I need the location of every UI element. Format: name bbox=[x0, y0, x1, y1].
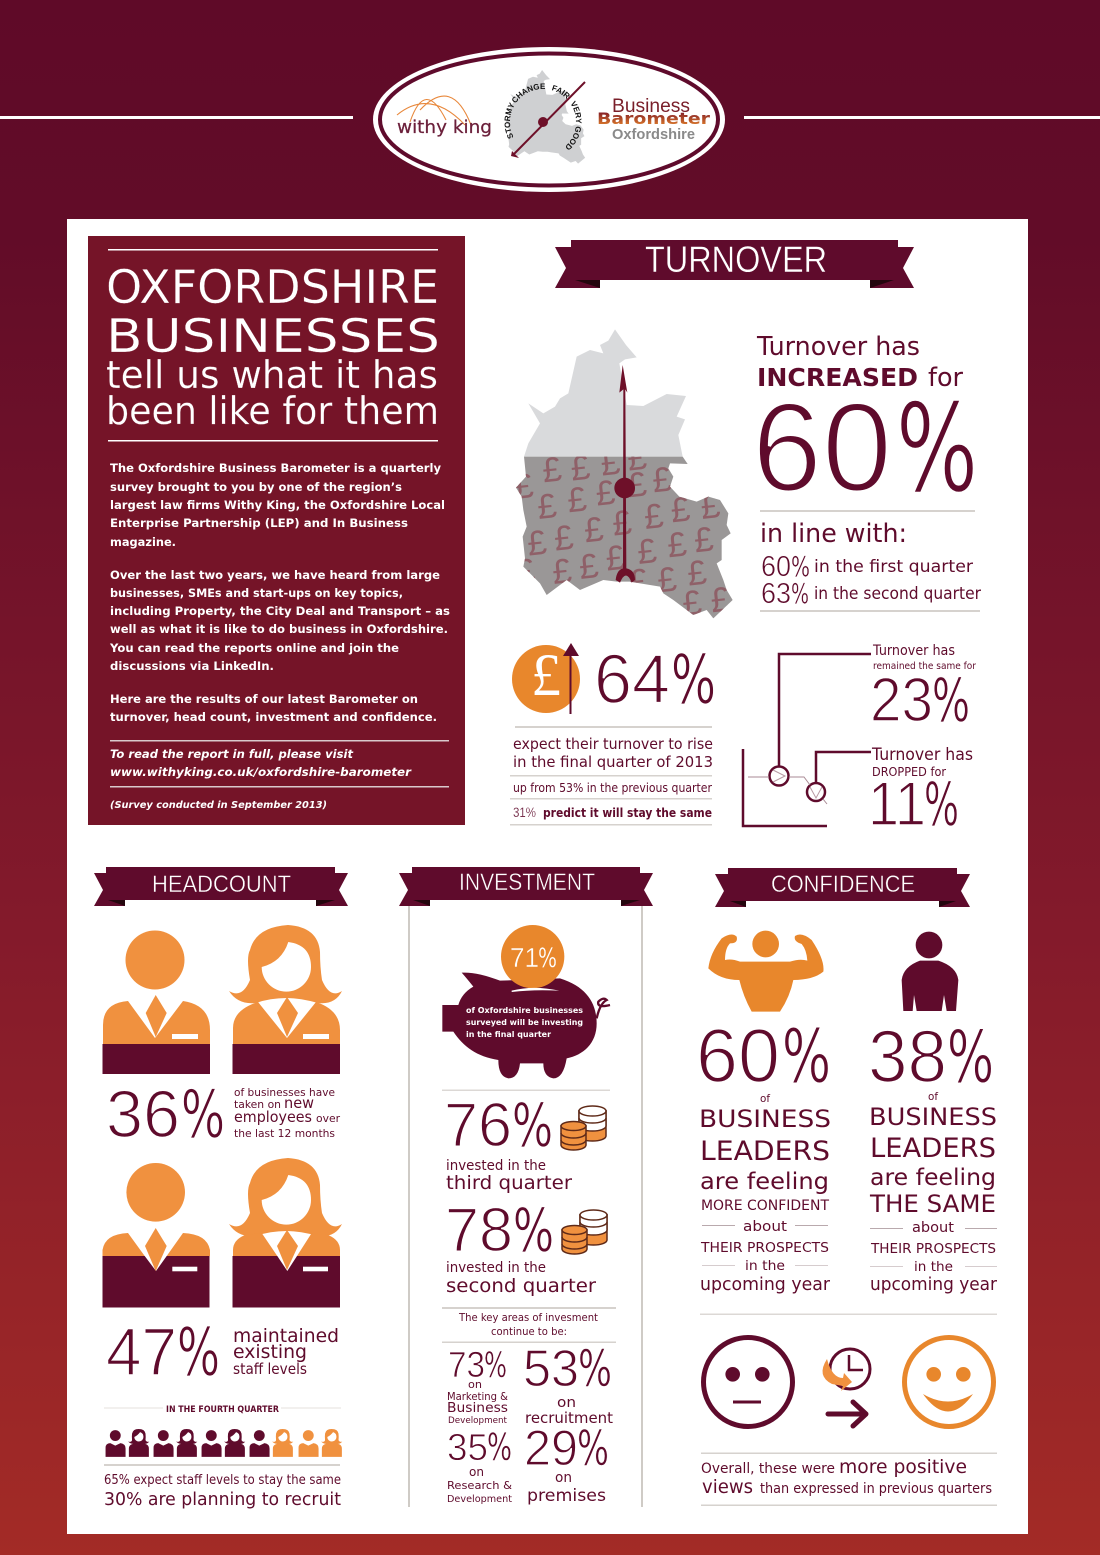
stat: 36% new employees: new bbox=[284, 1094, 314, 1112]
stat: 60% more confident: THEIR PROSPECTS bbox=[700, 1241, 829, 1256]
logo: Business Barometer Oxfordshire: Barometer bbox=[597, 109, 710, 128]
logo: barometer map dial: FAIR bbox=[552, 85, 570, 99]
stat: 73% marketing: Business bbox=[447, 1401, 508, 1416]
stat: 29% premises: on bbox=[555, 1470, 572, 1486]
logo: barometer map dial: CHANGE bbox=[512, 84, 546, 102]
stat: turnover increased 60%: for bbox=[928, 363, 963, 393]
icon: muscular figure bbox=[708, 931, 824, 1012]
stat: 36% new employees: % bbox=[181, 1078, 225, 1153]
stat: fourth quarter staffing bbox=[104, 1464, 341, 1510]
stat: 47% maintained staff levels: maintained bbox=[233, 1325, 339, 1347]
icon: Oxfordshire map with pound pattern bbox=[516, 330, 732, 618]
text: overall conclusion: Overall, these were bbox=[701, 1461, 835, 1477]
stat: turnover increased 60%: in the second quarter bbox=[814, 584, 981, 604]
text: overall conclusion: views bbox=[702, 1476, 753, 1498]
icon: coins bbox=[562, 1210, 607, 1254]
text: overall conclusion: than expressed in previous quarters bbox=[760, 1481, 992, 1497]
stat: 78% second quarter: % bbox=[513, 1196, 554, 1266]
stat: 64% expect turnover to rise: in the final quarter of 2013 bbox=[513, 753, 713, 771]
stat: turnover same 23%: Turnover has bbox=[872, 643, 955, 659]
intro paragraph 2: well as what it is like to do business in Oxfordshire. bbox=[110, 622, 448, 636]
heading: investment banner bbox=[399, 867, 653, 906]
stat: 60% more confident: upcoming year bbox=[700, 1274, 831, 1295]
pictogram: ten staff icons bbox=[106, 1429, 342, 1457]
intro paragraph 2: You can read the reports online and join the bbox=[109, 641, 399, 655]
stat: turnover dropped 11%: Turnover has bbox=[871, 745, 973, 764]
icon: Oxfordshire map with pound pattern: £ bbox=[512, 467, 535, 507]
stat: 60% more confident: about bbox=[743, 1219, 788, 1235]
icon: neutral face bbox=[704, 1338, 792, 1426]
stat: 53% recruitment: on bbox=[557, 1395, 576, 1411]
stat: 78% second quarter bbox=[445, 1196, 596, 1297]
stat: turnover same 23%: 23 bbox=[870, 666, 933, 735]
stat: fourth quarter staffing: 65% expect staff levels to stay the same bbox=[104, 1473, 341, 1488]
title: tell us what it has bbox=[106, 353, 438, 397]
stat: 78% second quarter: 78 bbox=[445, 1196, 513, 1265]
heading: confidence banner bbox=[715, 868, 970, 907]
intro paragraph 2: including Property, the City Deal and Transport – as bbox=[110, 604, 450, 618]
icon: Oxfordshire map with pound pattern: £ bbox=[599, 444, 622, 484]
stat: turnover increased 60%: in the first quarter bbox=[814, 557, 973, 577]
icon: Oxfordshire map with pound pattern: £ bbox=[526, 524, 549, 564]
stat: 73% marketing bbox=[447, 1344, 508, 1426]
stat: 60% more confident: of bbox=[760, 1092, 771, 1105]
intro paragraph 1 bbox=[110, 461, 445, 549]
intro paragraph 2: businesses, SMEs and start-ups on key topics, bbox=[110, 586, 403, 600]
intro paragraph 2 bbox=[109, 568, 450, 673]
stat: 60% more confident: BUSINESS bbox=[699, 1105, 831, 1133]
stat: 29% premises bbox=[524, 1420, 609, 1506]
icon: Oxfordshire map with pound pattern: £ bbox=[626, 439, 649, 479]
icon: Oxfordshire map with pound pattern: £ bbox=[582, 510, 605, 550]
stat: turnover increased 60%: 63 bbox=[761, 578, 791, 610]
icon: Oxfordshire map with pound pattern: £ bbox=[636, 532, 659, 572]
title bbox=[106, 260, 440, 433]
survey note: (Survey conducted in September 2013) bbox=[110, 800, 327, 811]
stat: 76% third quarter: invested in the bbox=[446, 1158, 546, 1174]
stat: 64% expect turnover to rise: expect their turnover to rise bbox=[513, 735, 713, 753]
intro paragraph 1: survey brought to you by one of the region’s bbox=[110, 480, 402, 494]
stat: turnover increased 60%: 60 bbox=[761, 551, 791, 583]
intro paragraph 1: The Oxfordshire Business Barometer is a quarterly bbox=[110, 461, 441, 475]
panel: introduction bbox=[88, 236, 465, 825]
text: key areas heading bbox=[442, 1307, 616, 1343]
text: overall conclusion: more positive bbox=[839, 1456, 967, 1478]
intro paragraph 3: Here are the results of our latest Barometer on bbox=[110, 692, 418, 706]
logo badge bbox=[373, 47, 725, 192]
stat: 53% recruitment: 53 bbox=[523, 1340, 579, 1398]
intro paragraph 1: magazine. bbox=[110, 535, 176, 549]
icon: piggy bank with coin: 71 bbox=[510, 942, 539, 973]
chart: gauge pipes bbox=[743, 654, 871, 826]
stat: turnover increased 60%: % bbox=[791, 577, 809, 610]
stat: 36% new employees bbox=[106, 1077, 340, 1153]
stat: 60% more confident bbox=[696, 1014, 831, 1295]
logo: Business Barometer Oxfordshire: Oxfordshire bbox=[612, 126, 695, 143]
text: key areas heading: continue to be: bbox=[491, 1325, 567, 1338]
stat: 73% marketing: Development bbox=[448, 1416, 507, 1426]
icon: smiling face bbox=[904, 1338, 994, 1426]
stat: 36% new employees: over bbox=[316, 1112, 340, 1125]
icon: coins bbox=[561, 1106, 606, 1150]
stat: 29% premises: 29 bbox=[524, 1420, 578, 1476]
icon: Oxfordshire map with pound pattern: £ bbox=[699, 487, 722, 527]
stat: 38% the same: are feeling bbox=[870, 1165, 996, 1191]
stat: turnover dropped 11%: % bbox=[924, 770, 959, 840]
stat: 38% the same bbox=[868, 1015, 998, 1295]
stat: 47% maintained staff levels: % bbox=[177, 1314, 220, 1391]
stat: 35% research: Development bbox=[447, 1494, 512, 1505]
logo: withy king: withy king bbox=[397, 117, 492, 138]
icon: Oxfordshire map with pound pattern: £ bbox=[552, 519, 575, 559]
stat: 35% research: 35 bbox=[447, 1427, 488, 1469]
subheading: in the fourth quarter: IN THE FOURTH QUARTER bbox=[166, 1405, 279, 1415]
icon: Oxfordshire map with pound pattern: £ bbox=[656, 560, 679, 600]
icon: Oxfordshire map with pound pattern: £ bbox=[551, 552, 574, 592]
stat: 60% more confident: % bbox=[782, 1014, 831, 1100]
icon: Oxfordshire map with pound pattern: £ bbox=[709, 580, 732, 620]
icon: Oxfordshire map with pound pattern: £ bbox=[541, 450, 564, 490]
stat: 38% the same: in the bbox=[914, 1260, 953, 1275]
stat: 60% more confident: are feeling bbox=[700, 1169, 829, 1195]
stat: 47% maintained staff levels: existing bbox=[233, 1341, 307, 1363]
text: overall conclusion bbox=[701, 1452, 997, 1506]
stat: 47% maintained staff levels: staff levels bbox=[233, 1360, 307, 1378]
logo: barometer map dial: VERY GOOD bbox=[566, 100, 582, 150]
icon: woman orange bbox=[229, 925, 342, 1074]
icon: Oxfordshire map with pound pattern: £ bbox=[536, 487, 559, 527]
stat: 64% expect turnover to rise: 64 bbox=[594, 640, 670, 718]
heading: turnover banner bbox=[555, 239, 914, 288]
stat: 64% expect turnover to rise: predict it will stay the same bbox=[543, 806, 712, 820]
stat: 38% the same: upcoming year bbox=[870, 1274, 998, 1295]
stat: 36% new employees: employees bbox=[234, 1108, 312, 1126]
title: been like for them bbox=[106, 389, 439, 433]
heading: investment banner: INVESTMENT bbox=[459, 869, 595, 896]
stat: turnover same 23% bbox=[870, 643, 977, 736]
stat: turnover increased 60%: 60 bbox=[752, 377, 892, 518]
stat: 36% new employees: taken on bbox=[234, 1098, 281, 1111]
logo: Business Barometer Oxfordshire bbox=[597, 96, 710, 143]
stat: 73% marketing: 73 bbox=[448, 1344, 485, 1385]
icon: Oxfordshire map with pound pattern: £ bbox=[651, 460, 674, 500]
stat: 47% maintained staff levels: 47 bbox=[106, 1314, 177, 1390]
stat: 73% marketing: Marketing & bbox=[447, 1391, 508, 1403]
icon: Oxfordshire map with pound pattern: £ bbox=[627, 562, 650, 602]
icon: man orange bbox=[102, 930, 210, 1074]
icon: Oxfordshire map with pound pattern: £ bbox=[604, 539, 627, 579]
icon: Oxfordshire map with pound pattern: £ bbox=[669, 490, 692, 530]
stat: 36% new employees: the last 12 months bbox=[234, 1127, 335, 1140]
icon: Oxfordshire map with pound pattern: £ bbox=[594, 474, 617, 514]
icon: Oxfordshire map with pound pattern: £ bbox=[681, 584, 704, 624]
intro paragraph 2: discussions via LinkedIn. bbox=[110, 659, 274, 673]
stat: 60% more confident: LEADERS bbox=[700, 1136, 830, 1167]
stat: turnover dropped 11%: 11 bbox=[868, 770, 926, 839]
stat: 38% the same: 38 bbox=[868, 1015, 947, 1098]
heading: headcount banner bbox=[94, 867, 348, 906]
stat: 73% marketing: on bbox=[468, 1378, 482, 1391]
stat: 78% second quarter: second quarter bbox=[446, 1275, 596, 1297]
stat: turnover same 23%: % bbox=[932, 666, 970, 736]
icon: woman maroon band bbox=[229, 1158, 342, 1308]
logo: Business Barometer Oxfordshire: Business bbox=[612, 96, 690, 117]
heading: confidence banner: CONFIDENCE bbox=[771, 871, 915, 898]
stat: 35% research: % bbox=[487, 1426, 512, 1469]
icon: Oxfordshire map with pound pattern: £ bbox=[569, 449, 592, 489]
stat: turnover increased 60%: in line with: bbox=[760, 519, 907, 549]
stat: 76% third quarter: % bbox=[512, 1091, 553, 1161]
intro paragraph 3: turnover, head count, investment and confidence. bbox=[110, 710, 437, 724]
stat: 29% premises: premises bbox=[527, 1486, 606, 1506]
stat: 53% recruitment: % bbox=[578, 1340, 612, 1398]
stat: 53% recruitment: recruitment bbox=[525, 1409, 613, 1427]
heading: turnover banner: TURNOVER bbox=[645, 239, 827, 280]
stat: 35% research: on bbox=[469, 1465, 484, 1479]
stat: 36% new employees: 36 bbox=[106, 1077, 180, 1152]
stat: turnover increased 60%: % bbox=[896, 378, 978, 520]
icon: piggy bank with coin bbox=[442, 925, 610, 1078]
title: OXFORDSHIRE bbox=[106, 260, 439, 314]
stat: 38% the same: THEIR PROSPECTS bbox=[870, 1242, 996, 1257]
stat: 78% second quarter: invested in the bbox=[446, 1260, 546, 1276]
icon: man maroon band bbox=[102, 1163, 210, 1308]
icon: Oxfordshire map with pound pattern: £ bbox=[577, 547, 600, 587]
stat: 53% recruitment bbox=[523, 1340, 613, 1427]
stat: turnover dropped 11% bbox=[868, 745, 973, 840]
stat: 64% expect turnover to rise: % bbox=[671, 641, 716, 720]
icon: plain figure bbox=[902, 932, 958, 1011]
stat: turnover same 23%: remained the same for bbox=[873, 661, 977, 672]
report link: www.withyking.co.uk/oxfordshire-barometer bbox=[110, 765, 412, 779]
stat: 60% more confident: in the bbox=[745, 1259, 785, 1274]
icon: piggy bank with coin: of Oxfordshire businesses bbox=[466, 1006, 583, 1015]
stat: turnover increased 60%: INCREASED bbox=[757, 363, 918, 392]
logo: withy king bbox=[397, 96, 492, 138]
stat: 38% the same: LEADERS bbox=[870, 1133, 996, 1164]
report link: To read the report in full, please visit bbox=[110, 747, 353, 761]
stat: 73% marketing: % bbox=[484, 1346, 507, 1386]
stat: 38% the same: % bbox=[947, 1015, 994, 1099]
intro paragraph 1: Enterprise Partnership (LEP) and In Business bbox=[110, 516, 408, 530]
stat: 76% third quarter: 76 bbox=[444, 1091, 512, 1160]
stat: turnover increased 60%: Turnover has bbox=[756, 332, 920, 362]
logo: barometer map dial: STORMY bbox=[504, 102, 514, 139]
icon: piggy bank with coin: surveyed will be investing bbox=[466, 1018, 583, 1027]
stat: 35% research bbox=[447, 1426, 512, 1505]
stat: 60% more confident: 60 bbox=[696, 1014, 780, 1099]
icon: Oxfordshire map with pound pattern: £ bbox=[626, 465, 649, 505]
stat: 38% the same: THE SAME bbox=[869, 1190, 996, 1218]
report link bbox=[110, 747, 412, 779]
stat: 64% expect turnover to rise bbox=[510, 640, 716, 826]
stat: 64% expect turnover to rise: up from 53% in the previous quarter bbox=[513, 781, 712, 795]
title: BUSINESSES bbox=[106, 309, 440, 363]
icon: pound coin with up arrow: £ bbox=[531, 642, 561, 708]
stat: 38% the same: of bbox=[928, 1090, 939, 1103]
stat: 38% the same: BUSINESS bbox=[869, 1103, 997, 1131]
icon: Oxfordshire map with pound pattern: £ bbox=[686, 554, 709, 594]
intro paragraph 1: largest law firms Withy King, the Oxfordshire Local bbox=[110, 498, 445, 512]
icon: Oxfordshire map with pound pattern: £ bbox=[611, 504, 634, 544]
icon: piggy bank with coin: in the final quarter bbox=[466, 1030, 551, 1039]
stat: turnover increased 60% bbox=[752, 332, 981, 612]
icon: piggy bank with coin: % bbox=[538, 943, 557, 974]
icon: Oxfordshire map with pound pattern: £ bbox=[514, 552, 537, 592]
stat: turnover dropped 11%: DROPPED for bbox=[872, 765, 946, 779]
text: key areas heading: The key areas of invesment bbox=[458, 1311, 599, 1324]
icon: Oxfordshire map with pound pattern: £ bbox=[642, 497, 665, 537]
intro paragraph 3 bbox=[110, 692, 437, 724]
stat: 60% more confident: MORE CONFIDENT bbox=[701, 1198, 829, 1214]
stat: 35% research: Research & bbox=[447, 1479, 512, 1492]
icon: Oxfordshire map with pound pattern: £ bbox=[692, 520, 715, 560]
icon: pound coin with up arrow bbox=[512, 642, 580, 714]
stat: 76% third quarter: third quarter bbox=[446, 1172, 572, 1194]
heading: headcount banner: HEADCOUNT bbox=[152, 871, 291, 898]
intro paragraph 2: Over the last two years, we have heard from large bbox=[110, 568, 440, 582]
stat: 29% premises: % bbox=[577, 1421, 609, 1477]
stat: 76% third quarter bbox=[444, 1091, 572, 1194]
stat: turnover increased 60%: % bbox=[791, 550, 810, 583]
stat: 38% the same: about bbox=[912, 1220, 955, 1236]
stat: fourth quarter staffing: 30% are planning to recruit bbox=[104, 1489, 341, 1510]
stat: 36% new employees: of businesses have bbox=[234, 1086, 335, 1099]
stat: 64% expect turnover to rise: 31% bbox=[513, 804, 536, 820]
icon: Oxfordshire map with pound pattern: £ bbox=[666, 525, 689, 565]
stat: 47% maintained staff levels bbox=[106, 1314, 339, 1391]
logo: barometer map dial bbox=[504, 70, 586, 164]
icon: Oxfordshire map with pound pattern: £ bbox=[566, 480, 589, 520]
icon: clock and arrow bbox=[823, 1349, 870, 1426]
